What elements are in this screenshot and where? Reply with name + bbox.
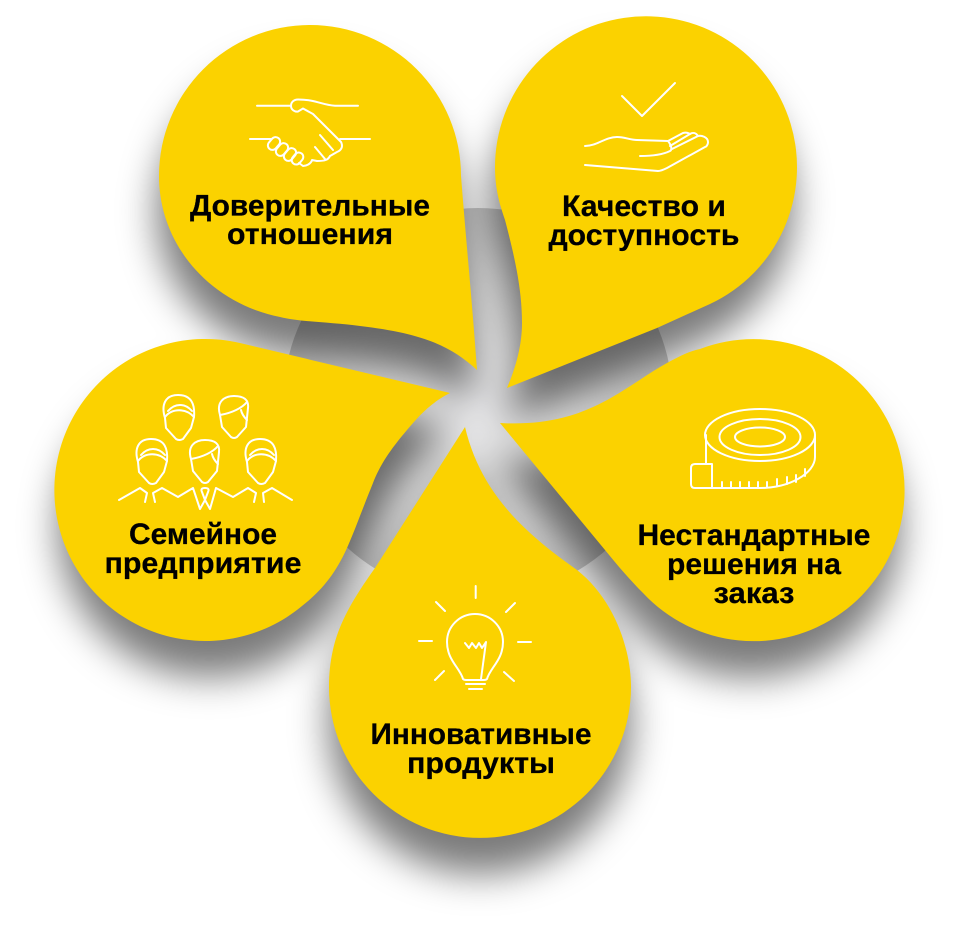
icon: handshake xyxy=(250,100,370,166)
label: Нестандартные xyxy=(638,519,870,552)
petal drop shadows xyxy=(58,52,901,874)
label: Семейное xyxy=(129,518,277,551)
label: Качество и xyxy=(562,190,726,223)
icon: hand with check mark xyxy=(585,83,708,171)
panel: Нестандартные решения на заказ xyxy=(500,339,905,641)
central grey disk xyxy=(283,208,673,598)
panel: Качество и доступность: доступность xyxy=(548,219,740,252)
panel: Нестандартные решения на заказ: заказ xyxy=(714,577,794,610)
icon: group of people xyxy=(119,395,292,509)
panel: Семейное предприятие: предприятие xyxy=(104,547,302,580)
panel: Инновативные продукты xyxy=(329,427,631,838)
icon: light bulb xyxy=(419,586,531,689)
panel: Доверительные отношения: отношения xyxy=(227,218,393,251)
panel: Инновативные продукты: продукты xyxy=(407,747,555,780)
label: Доверительные xyxy=(190,190,430,222)
icon: tape measure xyxy=(691,409,815,488)
panel: Качество и доступность xyxy=(495,16,797,388)
label: Инновативные xyxy=(370,718,592,751)
panel: Семейное предприятие xyxy=(54,339,450,641)
panel: Нестандартные решения на заказ: решения на xyxy=(667,548,841,581)
panel: Доверительные отношения xyxy=(159,25,477,370)
